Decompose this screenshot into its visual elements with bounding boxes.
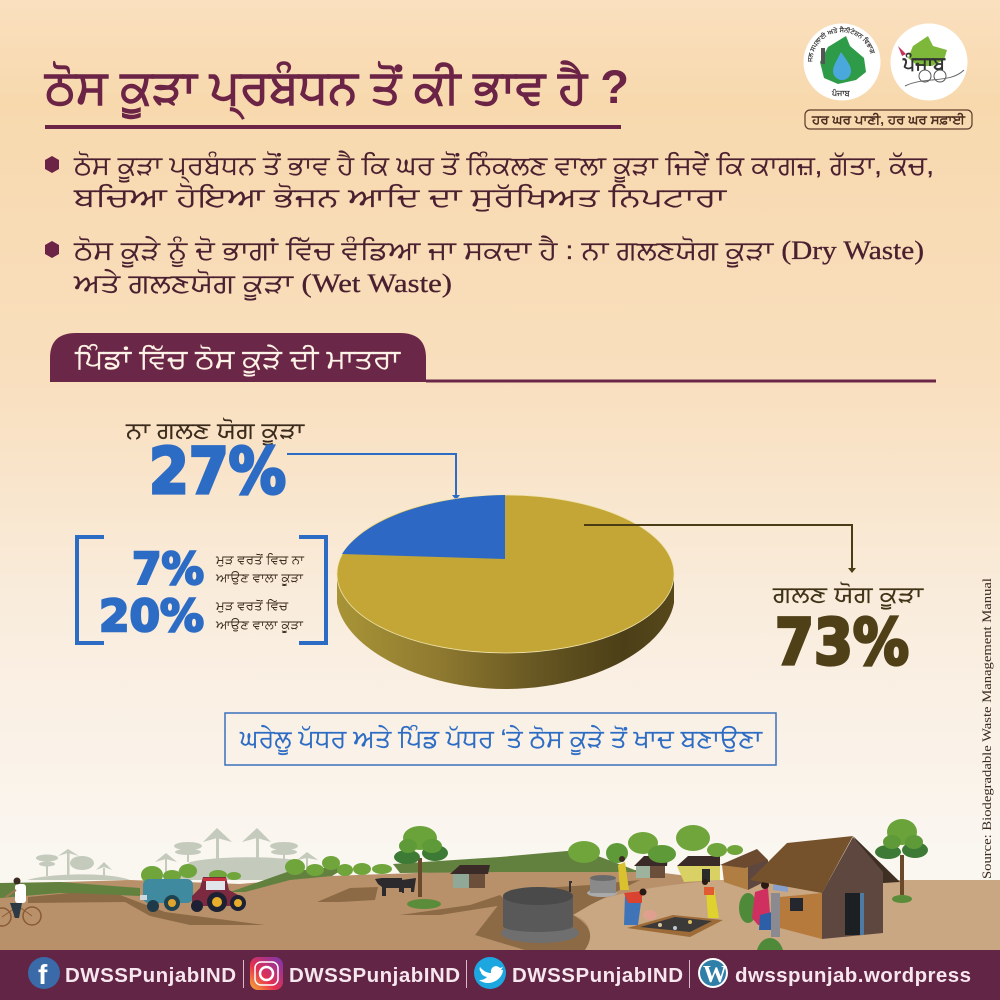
- icon: wordpress: W: [703, 962, 727, 988]
- handle: wordpress: dwsspunjab.wordpress: [735, 964, 971, 987]
- icon: hexagon bullet: [45, 156, 59, 173]
- pie chart: [337, 495, 674, 689]
- women figures: [618, 856, 788, 937]
- label: biodegradable 73%: 73%: [775, 606, 909, 679]
- bullet: definition: ਬਚਿਆ ਹੋਇਆ ਭੋਜਨ ਆਦਿ ਦਾ ਸੁਰੱਖਿਅਤ ਨਿਪਟਾਰਾ: [73, 182, 728, 212]
- icon: hexagon bullet: [45, 241, 59, 258]
- label: non-biodegradable 27%: ਨਾ ਗਲਣ ਯੋਗ ਕੂੜਾ: [125, 417, 306, 446]
- distant silhouettes: [27, 828, 318, 880]
- bullet: definition: ਠੋਸ ਕੂੜਾ ਪ੍ਰਬੰਧਨ ਤੋਂ ਭਾਵ ਹੈ ਕਿ ਘਰ ਤੋਂ ਨਿੰਕਲਣ ਵਾਲਾ ਕੂੜਾ ਜਿਵੇਂ ਕਿ ਕਾਗਜ਼, ਗੱਤਾ, ਕੱਚ,: [73, 150, 934, 183]
- small tank: [587, 875, 617, 897]
- source note: Source: Biodegradable Waste Management Manual: [979, 578, 994, 879]
- bracket right: [299, 537, 326, 643]
- bullet: two types: [45, 235, 924, 301]
- tree cluster centre: [568, 825, 743, 863]
- logo: water department: ਜਲ ਸਪਲਾਈ ਅਤੇ ਸੈਨੀਟੇਸ਼ਨ ਵਿਭਾਗ: [808, 26, 875, 62]
- village scene: [0, 819, 1000, 950]
- 20% row: 20%: [99, 591, 204, 642]
- icon: facebook: [28, 957, 60, 990]
- slogan pill: [805, 110, 972, 129]
- title: ਠੋਸ ਕੂੜਾ ਪ੍ਰਬੰਧਨ ਤੋਂ ਕੀ ਭਾਵ ਹੈ ?: [43, 60, 629, 121]
- bullet: two types: ਅਤੇ ਗਲਣਯੋਗ ਕੂੜਾ (Wet Waste): [73, 268, 452, 301]
- footer bar: [0, 950, 1000, 1000]
- handle: twitter: DWSSPunjabIND: [512, 964, 683, 987]
- icon: facebook: f: [38, 959, 48, 990]
- composting callout: ਘਰੇਲੂ ਪੱਧਰ ਅਤੇ ਪਿੰਡ ਪੱਧਰ ‘ਤੇ ਠੋਸ ਕੂੜੇ ਤੋਂ ਖਾਦ ਬਣਾਉਣਾ: [239, 725, 763, 755]
- compost pile: [627, 915, 723, 937]
- bullet: definition: [45, 150, 934, 212]
- biogas tank: [501, 882, 579, 943]
- logo: clean Punjab: [890, 24, 968, 100]
- section heading: ਪਿੰਡਾਂ ਵਿੱਚ ਠੋਸ ਕੂੜੇ ਦੀ ਮਾਤਰਾ: [74, 344, 401, 377]
- icon: cyclist: [0, 878, 41, 926]
- bracket left: [77, 537, 104, 643]
- small houses: [450, 849, 768, 890]
- logo: water department: [804, 24, 880, 100]
- label: non-biodegradable 27%: [125, 417, 306, 508]
- 20% row: ਮੁੜ ਵਰਤੋਂ ਵਿੱਚ: [215, 598, 290, 613]
- ground: [0, 870, 1000, 950]
- icon: tractor with tanker: [140, 877, 246, 912]
- pie gold slice: [337, 495, 674, 653]
- bullet: two types: ਠੋਸ ਕੂੜੇ ਨੂੰ ਦੋ ਭਾਗਾਂ ਵਿੱਚ ਵੰਡਿਆ ਜਾ ਸਕਦਾ ਹੈ : ਨਾ ਗਲਣਯੋਗ ਕੂੜਾ (Dry Waste): [73, 235, 924, 268]
- 7% row: 7%: [132, 544, 204, 595]
- shrubs row left: [141, 856, 392, 884]
- arrow: pie to 73%: [584, 525, 856, 573]
- left tree: [394, 826, 448, 909]
- 7% row: [132, 544, 306, 595]
- pie blue slice: [342, 495, 505, 559]
- big house: [750, 836, 900, 950]
- logo: water department: ਪੰਜਾਬ: [831, 87, 851, 98]
- section heading: [50, 333, 936, 382]
- 7% row: ਮੁੜ ਵਰਤੋਂ ਵਿਚ ਨਾ: [215, 552, 306, 567]
- bracket breakdown: [77, 537, 326, 643]
- composting callout: [225, 713, 776, 765]
- 7% row: ਆਉਣ ਵਾਲਾ ਕੂੜਾ: [215, 571, 305, 586]
- logos and slogan: [804, 24, 973, 130]
- arrow: 27% to blue slice: [287, 454, 460, 500]
- icon: wordpress: [698, 958, 728, 988]
- slogan pill: ਹਰ ਘਰ ਪਾਣੀ, ਹਰ ਘਰ ਸਫ਼ਾਈ: [811, 112, 967, 127]
- logo: clean Punjab: ਪੰਜਾਬ: [902, 52, 946, 75]
- right tree: [875, 819, 928, 903]
- icon: instagram: [250, 957, 283, 990]
- handle: instagram: DWSSPunjabIND: [289, 964, 460, 987]
- label: non-biodegradable 27%: 27%: [149, 435, 286, 508]
- handle: facebook: DWSSPunjabIND: [65, 964, 236, 987]
- dark ground patches: [28, 880, 640, 950]
- icon: twitter: [474, 957, 506, 989]
- green fields: [0, 851, 640, 898]
- label: biodegradable 73%: ਗਲਣ ਯੋਗ ਕੂੜਾ: [772, 581, 925, 610]
- lighter ground right: [573, 880, 1000, 950]
- icon: cattle: [375, 878, 416, 896]
- 20% row: ਆਉਣ ਵਾਲਾ ਕੂੜਾ: [215, 618, 305, 633]
- 20% row: [99, 591, 305, 642]
- pie side: [337, 574, 674, 689]
